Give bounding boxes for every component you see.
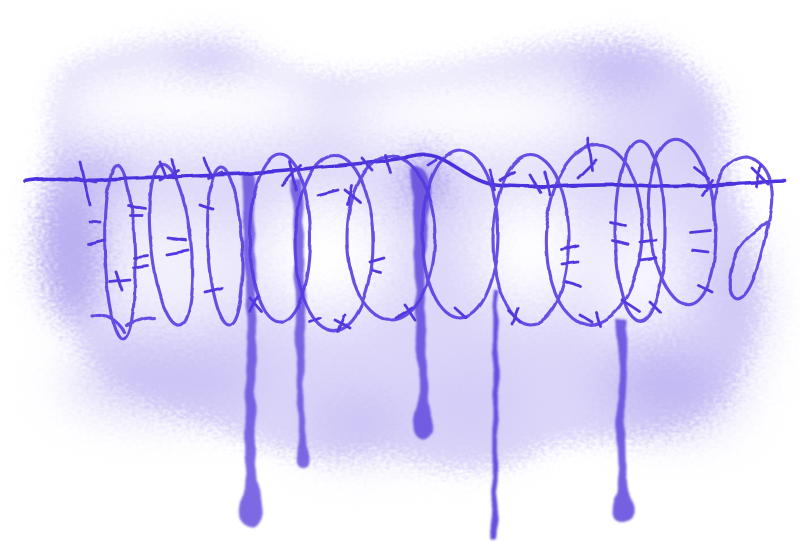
drip 2 — [291, 180, 309, 468]
drip 1 — [238, 175, 264, 526]
coil loops — [92, 136, 772, 339]
drip 5 — [612, 320, 634, 523]
watercolor wash — [39, 40, 760, 469]
drips — [238, 167, 634, 540]
drip 3 — [411, 167, 433, 439]
drip 4 — [491, 290, 498, 540]
barbed wire coils — [25, 136, 785, 339]
barbs — [76, 138, 768, 332]
top wire — [25, 155, 785, 186]
